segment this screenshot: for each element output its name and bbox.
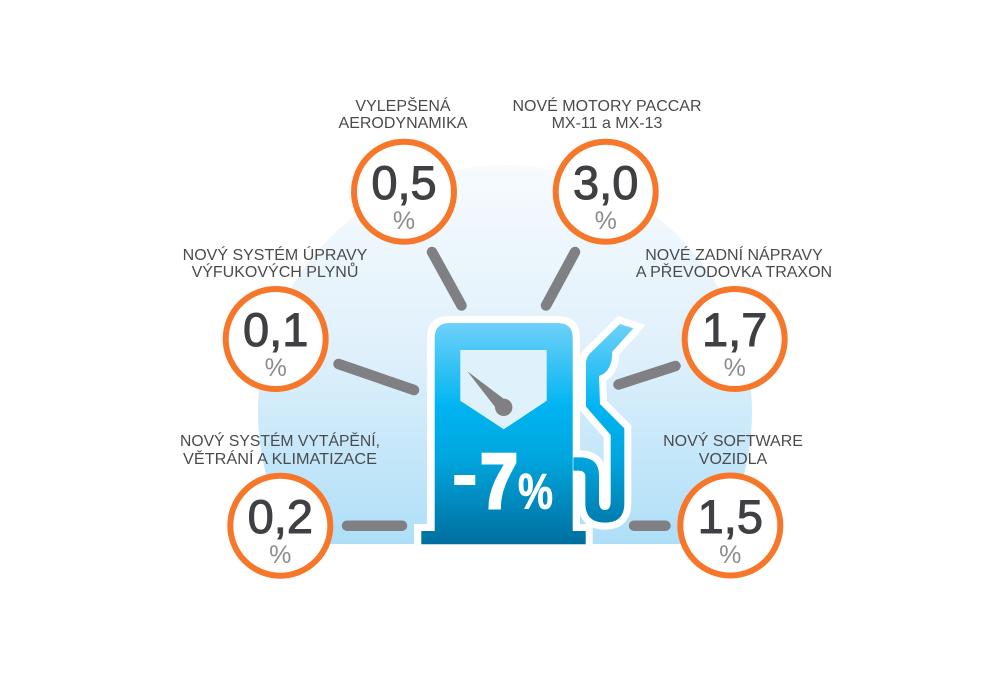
item: software: VOZIDLA bbox=[699, 451, 768, 468]
item: software bbox=[663, 431, 803, 576]
background glow shape bbox=[258, 165, 752, 544]
item: aerodynamics: % bbox=[393, 207, 415, 235]
item: software: 1,5 bbox=[698, 490, 763, 543]
item: aerodynamics: VYLEPŠENÁ bbox=[355, 96, 451, 115]
pump body bbox=[421, 323, 586, 544]
item: engines: 3,0 bbox=[573, 156, 638, 209]
pump value: -7% bbox=[454, 437, 553, 525]
item: software: NOVÝ SOFTWARE bbox=[663, 431, 803, 450]
item: hvac bbox=[180, 431, 380, 576]
item: axles bbox=[636, 245, 832, 389]
item: exhaust: NOVÝ SYSTÉM ÚPRAVY bbox=[183, 245, 368, 264]
item: engines: MX-11 a MX-13 bbox=[552, 115, 663, 132]
item: engines: NOVÉ MOTORY PACCAR bbox=[512, 96, 702, 115]
gauge needle bbox=[467, 371, 512, 416]
item: hvac: % bbox=[269, 541, 291, 569]
hose and nozzle bbox=[573, 324, 633, 523]
item: exhaust: 0,1 bbox=[243, 303, 308, 356]
item: exhaust: % bbox=[265, 354, 287, 382]
item: exhaust bbox=[183, 245, 368, 389]
item: hvac: 0,2 bbox=[248, 490, 313, 543]
item: axles: % bbox=[724, 354, 746, 382]
pump value: -7%: % bbox=[518, 464, 553, 520]
item: hvac: NOVÝ SYSTÉM VYTÁPĚNÍ, bbox=[180, 431, 380, 450]
item: engines bbox=[512, 96, 702, 242]
icon: fuel pump bbox=[414, 316, 633, 544]
item: aerodynamics: AERODYNAMIKA bbox=[339, 115, 468, 132]
gauge screen bbox=[460, 350, 547, 429]
item: exhaust: VÝFUKOVÝCH PLYNŮ bbox=[192, 262, 358, 281]
item: axles: A PŘEVODOVKA TRAXON bbox=[636, 262, 832, 281]
pump white outline bbox=[414, 316, 593, 544]
item: software: % bbox=[719, 541, 741, 569]
item: aerodynamics bbox=[339, 96, 468, 242]
item: engines: % bbox=[595, 207, 617, 235]
pump value: -7%: 7 bbox=[480, 437, 518, 525]
item: axles: NOVÉ ZADNÍ NÁPRAVY bbox=[645, 245, 823, 264]
item: axles: 1,7 bbox=[702, 303, 767, 356]
item: aerodynamics: 0,5 bbox=[371, 156, 437, 209]
item: hvac: VĚTRÁNÍ A KLIMATIZACE bbox=[183, 449, 377, 468]
connector lines bbox=[338, 252, 676, 526]
